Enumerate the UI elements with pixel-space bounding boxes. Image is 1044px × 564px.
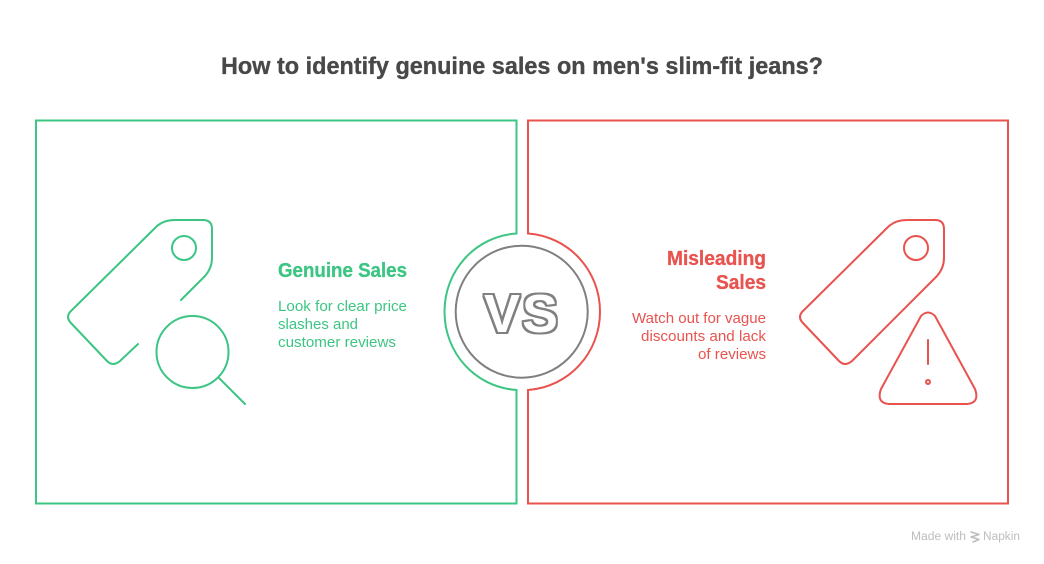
panel: misleading sales	[528, 120, 1008, 504]
icon: price tag with warning triangle	[800, 220, 976, 404]
panel outline: genuine	[36, 120, 516, 504]
text: misleading sales description: Watch out for vague	[632, 310, 766, 327]
icon: napkin logo	[971, 532, 979, 542]
heading: misleading sales: Sales	[716, 272, 766, 294]
watermark text right: Napkin	[983, 531, 1020, 543]
text: misleading sales description: discounts and lack	[641, 328, 767, 345]
text: genuine sales description	[278, 298, 407, 351]
vs badge	[456, 246, 588, 378]
panel: genuine sales	[36, 120, 516, 504]
text: genuine sales description: slashes and	[278, 316, 358, 333]
heading: misleading sales: Misleading	[667, 248, 766, 270]
icon: price tag with magnifier	[68, 220, 245, 404]
text: genuine sales description: customer reviews	[278, 334, 396, 351]
text: misleading sales description: of reviews	[698, 346, 766, 363]
text: misleading sales description	[632, 310, 767, 363]
panel outline: misleading	[528, 120, 1008, 504]
vs circle	[456, 246, 588, 378]
heading: genuine sales: Genuine Sales	[278, 260, 407, 282]
watermark text left: Made with	[911, 531, 966, 543]
title: How to identify genuine sales on men's slim-fit jeans?	[221, 53, 823, 80]
vs label: VS	[484, 284, 560, 344]
watermark: made with napkin	[911, 531, 1020, 543]
text: genuine sales description: Look for clear price	[278, 298, 407, 315]
heading: misleading sales	[667, 248, 766, 294]
